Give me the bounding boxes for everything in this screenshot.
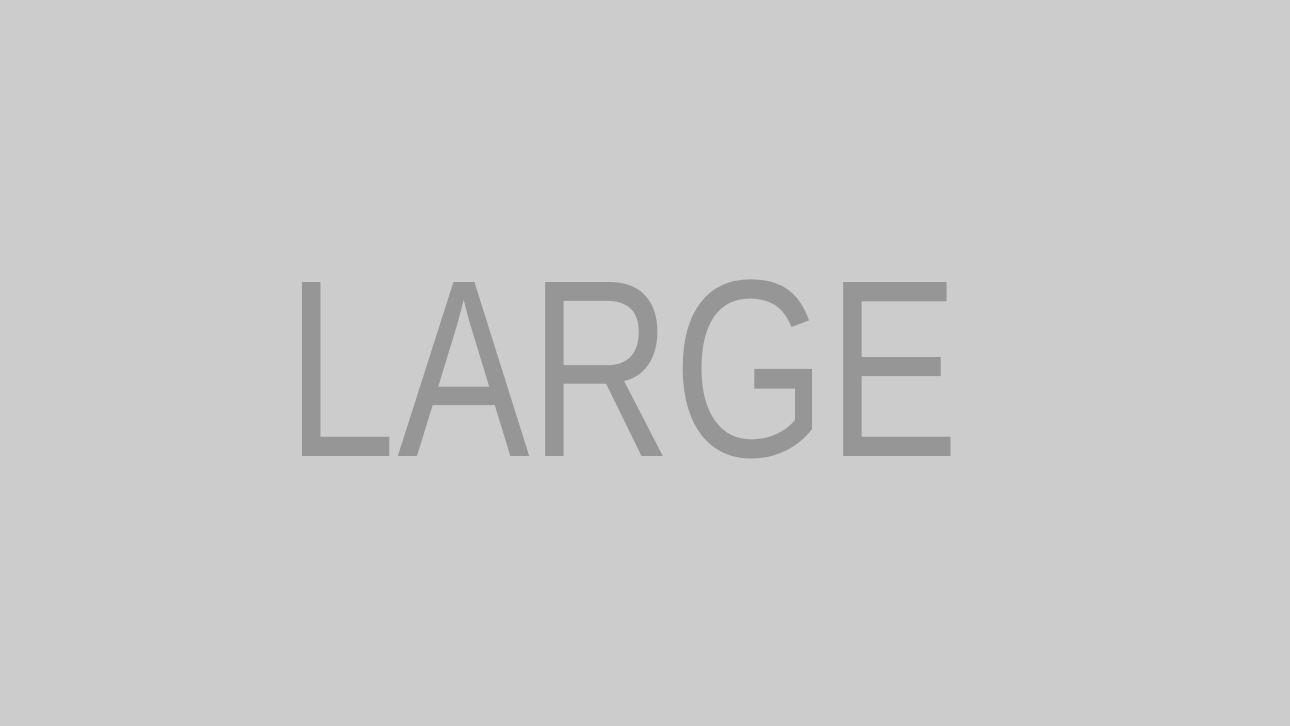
heading: LARGE: LARGE (286, 228, 959, 511)
